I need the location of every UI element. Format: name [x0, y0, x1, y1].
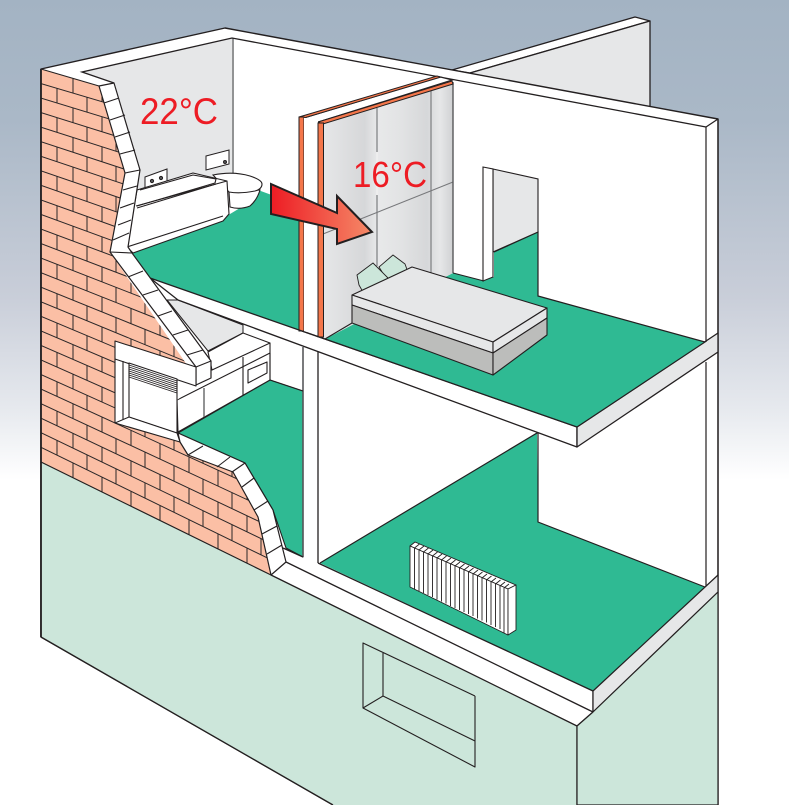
brick courses [42, 78, 267, 563]
facade right face [577, 592, 718, 805]
wall corner line [232, 38, 234, 174]
temperature label: bedroom: 16°C [353, 154, 427, 195]
wall section with orange insulation [299, 76, 453, 339]
flush panel [206, 150, 229, 170]
heat flow arrow [271, 184, 372, 244]
temperature label: bathroom: 22°C [140, 91, 218, 132]
block joints [104, 98, 211, 367]
brick wall [40, 69, 270, 637]
kitchen back wall [167, 300, 243, 351]
facade side strip [593, 575, 718, 712]
floor edge lines [325, 232, 705, 427]
upper wall blocks [99, 83, 211, 385]
ground floor window opening [363, 643, 475, 767]
window blind [129, 365, 177, 393]
living room floor [320, 433, 705, 691]
bedroom floor [325, 232, 705, 427]
right wall lines [706, 119, 718, 587]
bathroom floor [132, 190, 299, 330]
bed [352, 267, 547, 375]
partition wall [270, 347, 318, 563]
lintel [115, 341, 196, 386]
tap panel [145, 169, 167, 189]
cut wall blocks [99, 83, 286, 575]
ground floor: living room [270, 119, 718, 691]
kitchen window [115, 341, 196, 442]
upper floor: bathroom [82, 38, 706, 330]
first floor slab [150, 278, 718, 447]
pillows [357, 255, 409, 293]
ground floor: kitchen [167, 300, 303, 557]
brick bottom edge [41, 462, 271, 575]
top wall inner line [82, 38, 706, 127]
window reveal line [122, 361, 124, 420]
kitchen floor [178, 380, 303, 557]
floor strip lines [283, 548, 593, 726]
radiator [410, 542, 516, 635]
window surround [115, 359, 196, 442]
toilet [213, 173, 262, 208]
facade outlines [271, 575, 577, 805]
sky background [0, 0, 789, 480]
floor edge lines [320, 433, 705, 587]
lower block joints [188, 446, 282, 554]
bath tub [127, 173, 229, 253]
bathroom back wall [82, 38, 232, 205]
front facade [41, 462, 718, 805]
door opening [483, 167, 538, 281]
bedroom partition wall [323, 82, 484, 339]
top edge of brick [41, 69, 99, 86]
facade left face [41, 462, 577, 805]
brick fill [41, 69, 271, 575]
kitchen counter [177, 333, 270, 432]
window pane [129, 363, 177, 433]
neighbouring wall behind house [452, 17, 650, 108]
window sill [115, 417, 180, 442]
lower wall blocks [178, 433, 286, 575]
left outline [40, 69, 42, 637]
window surround left edge [114, 359, 116, 423]
bedroom [299, 76, 705, 427]
